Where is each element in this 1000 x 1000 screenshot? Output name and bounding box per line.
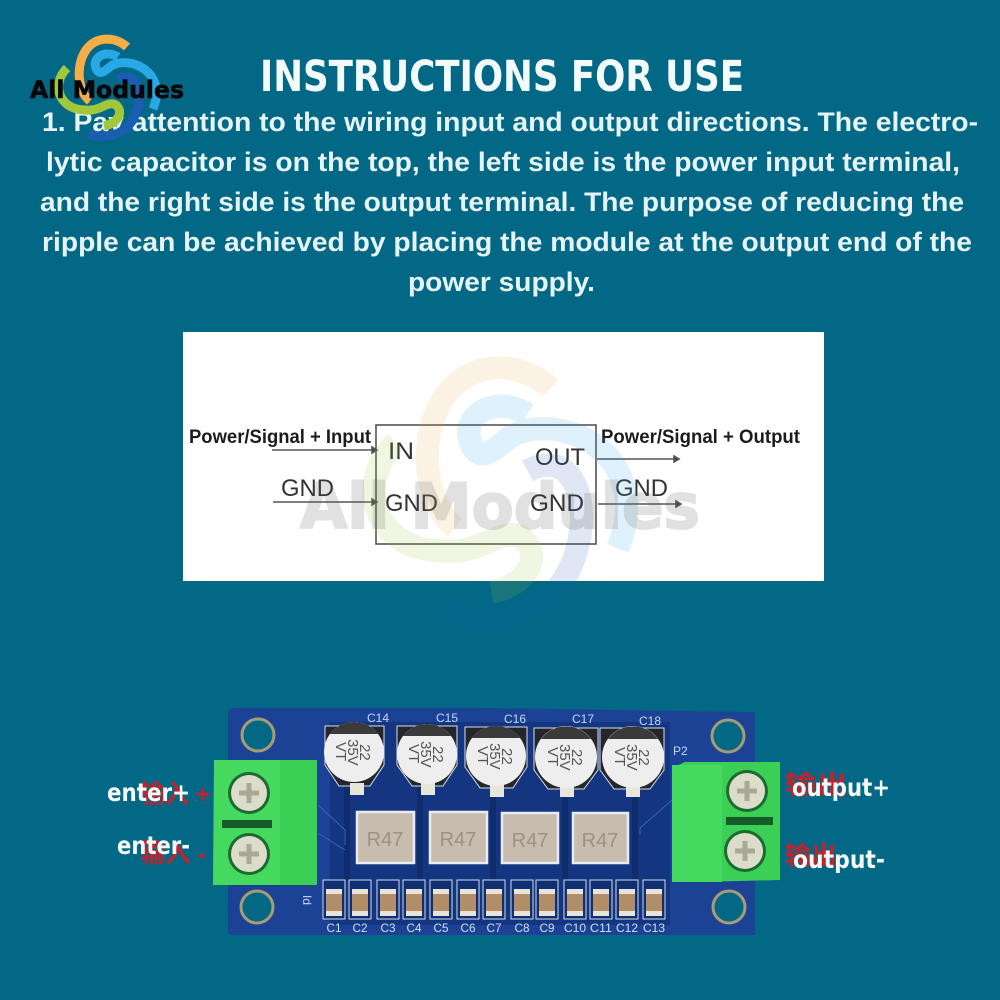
ceramic capacitor labels: C12 xyxy=(616,921,638,935)
label: output minus: output- xyxy=(793,845,885,874)
ceramic capacitor labels: C1 xyxy=(326,921,342,935)
instructions text block: power supply. xyxy=(408,267,595,297)
label: output plus: output+ xyxy=(792,773,890,802)
instructions text block: ripple can be achieved by placing the module at the output end of the xyxy=(42,227,972,257)
electrolytic capacitors C14-C18: VT xyxy=(405,744,422,763)
inductors R47: R47 xyxy=(512,830,548,852)
electrolytic capacitors C14-C18: VT xyxy=(332,742,349,761)
ceramic capacitor labels: C6 xyxy=(460,921,476,935)
left green terminal block xyxy=(213,760,317,885)
electrolytic capacitors C14-C18 xyxy=(324,722,664,797)
electrolytic capacitors C14-C18: 35V xyxy=(623,744,640,771)
ceramic capacitors C1-C13 xyxy=(323,880,665,935)
terminal labels xyxy=(281,438,668,517)
inductors R47: R47 xyxy=(582,830,618,852)
electrolytic capacitors C14-C18: 35V xyxy=(486,743,503,770)
ceramic capacitor labels: C11 xyxy=(590,921,612,935)
ceramic capacitor labels: C8 xyxy=(514,921,530,935)
wiring labels: Power/Signal + Output xyxy=(601,427,801,448)
instructions text block: 1. Pay attention to the wiring input and output directions. The electro- xyxy=(42,107,978,137)
ceramic capacitor labels: C2 xyxy=(352,921,368,935)
mounting holes xyxy=(241,719,745,923)
silkscreen capacitor labels: C16 xyxy=(504,712,526,726)
ceramic capacitor labels: C3 xyxy=(380,921,396,935)
right green terminal block xyxy=(672,762,780,882)
terminal labels: GND xyxy=(615,475,668,502)
watermark logo xyxy=(300,368,700,619)
silkscreen capacitor labels: C17 xyxy=(572,712,594,726)
ceramic capacitor labels: C5 xyxy=(434,921,449,935)
board xyxy=(228,708,755,935)
ceramic capacitor labels: C10 xyxy=(564,921,586,935)
inductors R47 xyxy=(357,812,628,863)
panel: wiring diagram xyxy=(183,332,824,581)
circuit board photo xyxy=(213,708,780,935)
label: output minus: 输出 xyxy=(785,841,837,871)
ceramic capacitor labels: C13 xyxy=(643,921,665,935)
terminal labels: OUT xyxy=(535,444,585,471)
watermark logo: All Modules xyxy=(300,470,700,543)
terminal labels: GND xyxy=(385,490,438,517)
silkscreen capacitor labels: C14 xyxy=(367,711,389,725)
instructions text block: lytic capacitor is on the top, the left side is the power input terminal, xyxy=(46,147,960,177)
electrolytic capacitors C14-C18: 22 xyxy=(568,749,585,766)
arrows xyxy=(272,447,681,507)
silkscreen capacitor labels: C15 xyxy=(436,711,458,725)
silkscreen capacitor labels: P2 xyxy=(673,744,688,758)
label: input minus: 输入 - xyxy=(140,838,206,868)
terminal labels: GND xyxy=(530,490,584,517)
label: input plus: enter+ xyxy=(107,778,190,807)
silkscreen capacitor labels xyxy=(300,711,688,905)
electrolytic capacitors C14-C18: VT xyxy=(611,747,628,766)
label: output plus: 输出 xyxy=(785,770,848,800)
title: INSTRUCTIONS FOR USE xyxy=(260,52,744,102)
silkscreen capacitor labels: C18 xyxy=(639,714,661,728)
wiring labels: Power/Signal + Input xyxy=(189,427,372,448)
instructions text block xyxy=(40,107,978,297)
instructions text block: and the right side is the output terminal. The purpose of reducing the xyxy=(40,187,964,217)
module box xyxy=(376,425,596,544)
logo: All Modules: All Modules xyxy=(30,76,184,104)
inductors R47: R47 xyxy=(440,829,476,851)
electrolytic capacitors C14-C18: 35V xyxy=(344,739,361,766)
electrolytic capacitors C14-C18: 35V xyxy=(556,744,573,771)
ceramic capacitor labels: C9 xyxy=(540,921,555,935)
electrolytic capacitors C14-C18: 22 xyxy=(498,748,515,765)
ceramic capacitor labels xyxy=(326,921,665,935)
wiring labels xyxy=(189,427,801,448)
label: input plus: 输入 + xyxy=(140,779,210,809)
electrolytic capacitors C14-C18: 35V xyxy=(417,741,434,768)
terminal labels: GND xyxy=(281,475,334,502)
label: input minus: enter- xyxy=(117,831,190,860)
electrolytic capacitors C14-C18: 22 xyxy=(356,744,373,761)
electrolytic capacitors C14-C18: VT xyxy=(544,747,561,766)
electrolytic capacitors C14-C18: 22 xyxy=(429,746,446,763)
electrolytic capacitors C14-C18: VT xyxy=(474,746,491,765)
inductors R47: R47 xyxy=(367,829,403,851)
electrolytic capacitors C14-C18: 22 xyxy=(635,749,652,766)
ceramic capacitor labels: C7 xyxy=(486,921,502,935)
ceramic capacitor labels: C4 xyxy=(406,921,422,935)
logo: All Modules xyxy=(30,39,184,136)
terminal labels: IN xyxy=(388,438,414,465)
silkscreen capacitor labels: Id xyxy=(300,895,314,905)
